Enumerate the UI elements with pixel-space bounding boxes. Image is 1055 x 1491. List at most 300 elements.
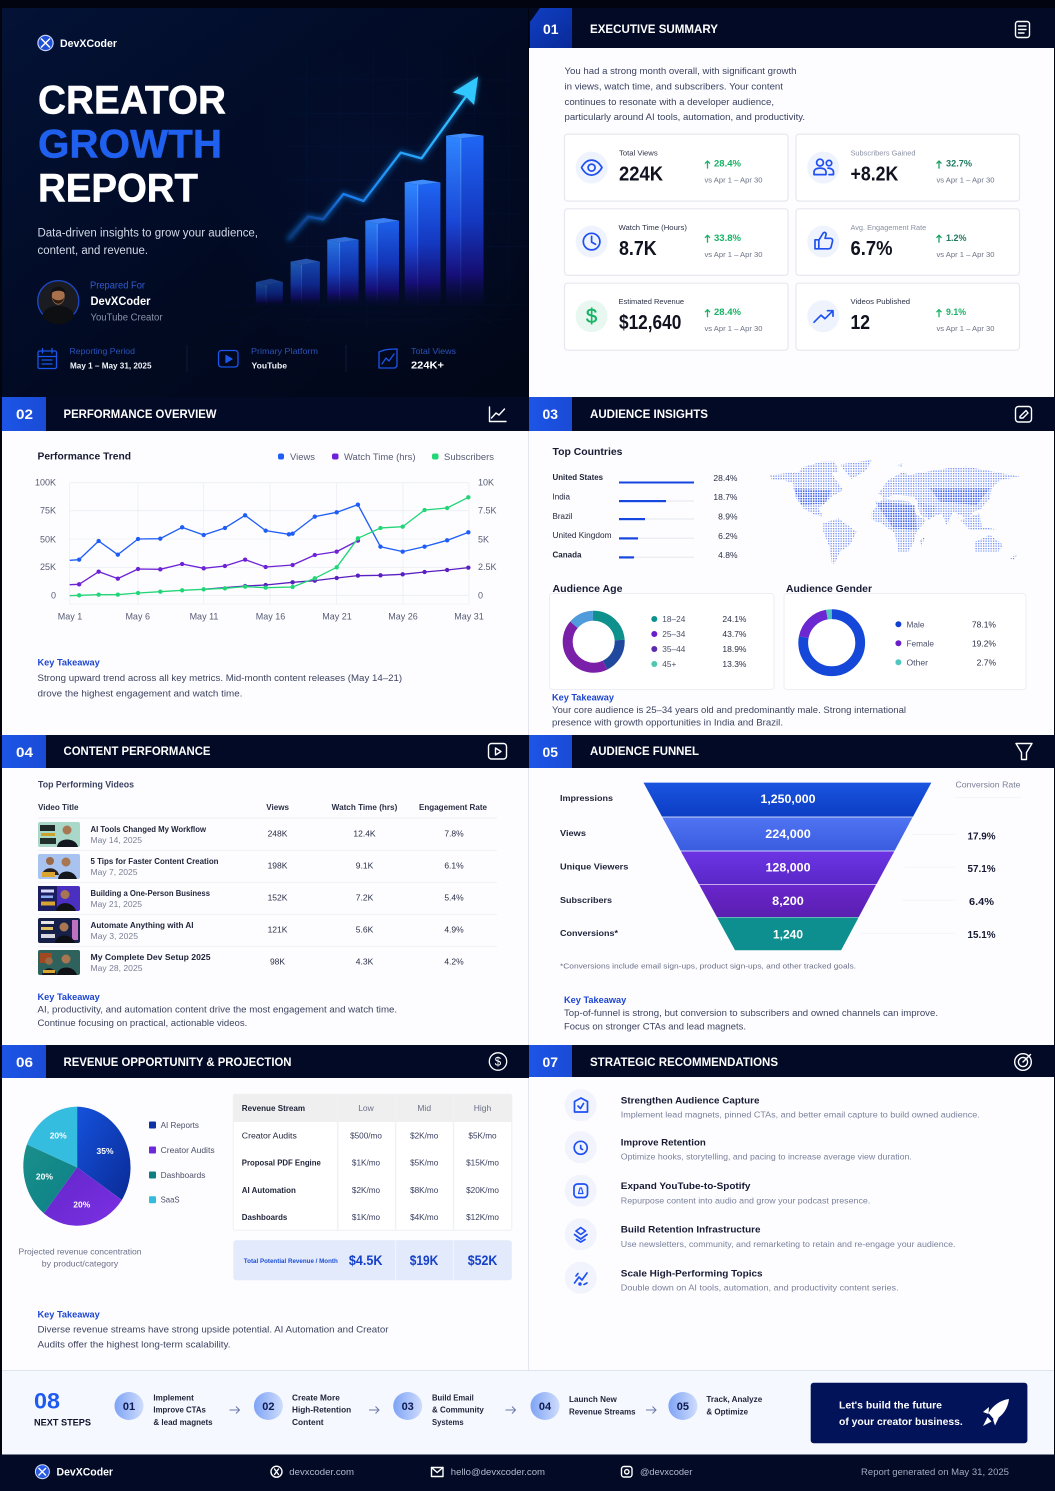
table values: 7.2K xyxy=(356,893,374,903)
footnote: *Conversions include email sign-ups, product sign-ups, and other tracked goals. xyxy=(560,962,856,970)
call to action: Let's build the future xyxy=(839,1400,942,1412)
section number 05 xyxy=(529,735,572,768)
chart heading: Performance Trend xyxy=(38,450,131,462)
step 2: 02 xyxy=(262,1401,275,1413)
title: REPORT xyxy=(38,167,198,211)
revenue table: AI Automation xyxy=(242,1186,296,1195)
section number 02 xyxy=(2,397,46,431)
card: videos published: vs Apr 1 – Apr 30 xyxy=(936,324,994,333)
line chart xyxy=(35,478,497,622)
recommendation 3 xyxy=(565,1175,870,1207)
card: subscribers gained: Subscribers Gained xyxy=(850,151,916,158)
card: subscribers gained: 32.7% xyxy=(946,159,972,169)
revenue table: Creator Audits xyxy=(242,1132,297,1141)
audience age xyxy=(550,583,774,690)
meta: total views: Total Views xyxy=(411,346,456,356)
recommendation 4: Build Retention Infrastructure xyxy=(621,1225,760,1236)
card: estimated revenue: $12,640 xyxy=(619,312,681,334)
next steps label: 08 xyxy=(34,1388,60,1414)
table values: 9.1K xyxy=(356,861,374,871)
recommendation 2: Improve Retention xyxy=(621,1137,706,1148)
key takeaway: drove the highest engagement and watch time. xyxy=(38,688,243,698)
revenue table: $20K/mo xyxy=(466,1186,499,1195)
legend: age: 45+ xyxy=(662,659,676,669)
x-axis labels: May 6 xyxy=(125,612,150,622)
audience age: Audience Age xyxy=(552,583,623,595)
funnel chart xyxy=(643,783,931,950)
revenue table: $1K/mo xyxy=(352,1159,381,1168)
prepared for: YouTube Creator xyxy=(90,313,163,324)
total potential revenue: $19K xyxy=(410,1253,439,1268)
audience age: 24.1% xyxy=(722,614,747,624)
icon: dollar xyxy=(489,1053,507,1070)
section number 02: 02 xyxy=(16,406,33,422)
y-axis right labels: 2.5K xyxy=(478,562,497,572)
card: watch time: 33.8% xyxy=(714,233,741,243)
card: engagement rate: 1.2% xyxy=(946,233,966,243)
conversion rates: 6.4% xyxy=(969,896,995,908)
recommendation 5: Double down on AI tools, automation, and productivity content series. xyxy=(621,1284,899,1293)
funnel chart: 224,000 xyxy=(765,827,811,841)
panel: hero cover xyxy=(2,8,560,397)
revenue table: $5K/mo xyxy=(410,1159,439,1168)
footer social xyxy=(622,1466,692,1477)
card: total views: vs Apr 1 – Apr 30 xyxy=(704,176,762,185)
icon: globe badge xyxy=(1016,406,1032,422)
card: estimated revenue: $ xyxy=(586,306,597,328)
revenue table: Proposal PDF Engine xyxy=(242,1159,321,1168)
video titles and dates: 5 Tips for Faster Content Creation xyxy=(90,857,219,866)
key takeaway: Key Takeaway xyxy=(38,1310,100,1320)
report date: Report generated on May 31, 2025 xyxy=(861,1467,1009,1477)
legend: Watch Time (hrs) xyxy=(344,452,416,462)
card: total views xyxy=(564,134,788,201)
recommendation 4 xyxy=(565,1218,956,1250)
donut: age xyxy=(568,616,620,668)
footer website xyxy=(271,1466,354,1477)
summary text: in views, watch time, and subscribers. Your content xyxy=(564,82,783,92)
pie caption: Projected revenue concentration xyxy=(18,1246,142,1256)
prepared for: Prepared For xyxy=(90,281,146,292)
legend: Views xyxy=(290,452,316,462)
recommendation 5: Scale High-Performing Topics xyxy=(621,1268,763,1279)
icon: dollar: $ xyxy=(495,1056,502,1068)
card: videos published xyxy=(796,283,1020,350)
title xyxy=(38,78,226,211)
key takeaway xyxy=(552,693,906,728)
revenue table: Dashboards xyxy=(242,1213,288,1222)
revenue table: $12K/mo xyxy=(466,1213,499,1222)
panel: revenue opportunity xyxy=(2,1045,529,1370)
video table: May 28, 2025 xyxy=(90,964,143,973)
key takeaway: Focus on stronger CTAs and lead magnets. xyxy=(564,1022,746,1032)
pie chart: 20% xyxy=(73,1199,91,1209)
thumbnail 2 xyxy=(38,854,80,879)
pie caption: by product/category xyxy=(42,1259,119,1269)
title: CREATOR xyxy=(38,78,226,122)
card: estimated revenue xyxy=(564,283,788,350)
table values: 248K xyxy=(268,829,288,839)
pie legend: Dashboards xyxy=(161,1170,205,1180)
data series xyxy=(70,495,471,597)
funnel chart: 1,240 xyxy=(773,927,803,941)
y-axis left labels: 100K xyxy=(35,478,56,488)
table values: 4.2% xyxy=(444,957,464,967)
icon: play button xyxy=(488,744,506,759)
table values: 5.4% xyxy=(444,893,464,903)
panel: audience insights xyxy=(529,397,1055,735)
table values: 7.8% xyxy=(444,829,464,839)
arrow xyxy=(506,1406,516,1414)
card: estimated revenue: 28.4% xyxy=(714,307,741,317)
card: videos published: Videos Published xyxy=(850,299,910,306)
icon: document xyxy=(1016,22,1030,38)
revenue table: Revenue Stream xyxy=(242,1104,305,1113)
key takeaway xyxy=(38,1310,388,1350)
subtitle: content, and revenue. xyxy=(38,245,148,257)
total potential revenue: $52K xyxy=(468,1253,498,1268)
card: subscribers gained: vs Apr 1 – Apr 30 xyxy=(936,176,994,185)
funnel stage labels: Unique Viewers xyxy=(560,862,629,872)
heading: STRATEGIC RECOMMENDATIONS xyxy=(590,1055,778,1069)
audience age: 18.9% xyxy=(722,644,747,654)
legend: age: 18–24 xyxy=(662,614,686,624)
recommendation 5 xyxy=(565,1262,899,1294)
pie legend xyxy=(149,1120,215,1205)
pie chart xyxy=(23,1107,131,1226)
recommendation 2 xyxy=(565,1131,912,1163)
arrow xyxy=(369,1406,379,1414)
card: total views: 224K xyxy=(619,164,664,186)
funnel stage labels xyxy=(560,793,629,938)
total potential revenue: $4.5K xyxy=(349,1253,383,1268)
video titles and dates: Building a One-Person Business xyxy=(90,889,211,898)
icon: funnel xyxy=(1016,744,1032,760)
card: engagement rate: Avg. Engagement Rate xyxy=(850,225,926,232)
y-axis left labels xyxy=(35,478,56,600)
key takeaway: Key Takeaway xyxy=(38,992,100,1002)
panel: audience funnel xyxy=(529,735,1055,1045)
step 5 xyxy=(668,1392,763,1420)
top countries: Canada xyxy=(552,550,582,560)
table values: 98K xyxy=(270,957,285,967)
video titles and dates xyxy=(90,825,219,962)
audience gender: 2.7% xyxy=(977,657,996,667)
legend: gender: Female xyxy=(906,638,934,648)
step 5: 05 xyxy=(677,1401,689,1413)
legend: age: 35–44 xyxy=(662,644,686,654)
pie legend: SaaS xyxy=(161,1195,180,1205)
meta: total views: 224K+ xyxy=(411,361,444,372)
x-axis labels: May 16 xyxy=(256,612,285,622)
meta: primary platform xyxy=(218,346,318,371)
brand logo xyxy=(38,35,118,51)
top countries: 8.9% xyxy=(718,512,738,522)
panel: content performance xyxy=(2,735,529,1045)
video titles and dates: Automate Anything with AI xyxy=(90,921,194,930)
pie chart: 20% xyxy=(36,1172,53,1182)
section number 03: 03 xyxy=(542,406,558,422)
arrow xyxy=(646,1406,656,1414)
footer email: hello@devxcoder.com xyxy=(451,1467,545,1477)
revenue table: $2K/mo xyxy=(352,1186,381,1195)
step 3: Systems xyxy=(432,1418,464,1427)
key takeaway: Your core audience is 25–34 years old and predominantly male. Strong international xyxy=(552,705,906,715)
step 2: High-Retention xyxy=(292,1406,351,1414)
top countries: Top Countries xyxy=(552,446,623,458)
table subtitle: Top Performing Videos xyxy=(38,780,134,790)
key takeaway: Key Takeaway xyxy=(552,693,614,703)
heading: PERFORMANCE OVERVIEW xyxy=(64,407,217,421)
funnel stage labels: Impressions xyxy=(560,793,613,803)
thumbnail 5 xyxy=(38,950,80,975)
audience gender: Audience Gender xyxy=(786,583,872,595)
key takeaway: Audits offer the highest long-term scalability. xyxy=(38,1340,231,1350)
y-axis right labels: 10K xyxy=(478,478,494,488)
section number 01: 01 xyxy=(543,21,559,37)
key takeaway xyxy=(564,995,938,1032)
audience gender: 19.2% xyxy=(972,638,996,648)
panel: strategic recommendations xyxy=(529,1045,1055,1370)
audience age: 43.7% xyxy=(722,629,747,639)
pie chart: 35% xyxy=(96,1146,114,1156)
revenue table: Low xyxy=(358,1103,375,1113)
title: GROWTH xyxy=(38,123,222,167)
card: subscribers gained xyxy=(796,134,1020,201)
subtitle xyxy=(38,227,258,257)
conversion rates: 57.1% xyxy=(968,863,996,875)
card: watch time: Watch Time (Hours) xyxy=(618,225,687,232)
summary text: particularly around AI tools, automation, and productivity. xyxy=(564,112,805,122)
world dot map xyxy=(770,460,1020,563)
table header: Views xyxy=(266,803,290,812)
audience age: 13.3% xyxy=(722,659,747,669)
icon: rocket xyxy=(983,1399,1009,1426)
recommendation 3: Repurpose content into audio and grow your podcast presence. xyxy=(621,1196,870,1205)
meta: primary platform: YouTube xyxy=(252,361,287,371)
table values: 5.6K xyxy=(356,925,374,935)
section number 06: 06 xyxy=(16,1054,33,1070)
card: videos published: 9.1% xyxy=(946,307,966,317)
top countries xyxy=(552,446,738,560)
section number 07: 07 xyxy=(542,1054,558,1070)
step 1 xyxy=(114,1392,213,1427)
key takeaway: Key Takeaway xyxy=(564,995,626,1005)
revenue table: $4K/mo xyxy=(410,1213,439,1222)
top countries: 28.4% xyxy=(713,473,738,483)
table header: Watch Time (hrs) xyxy=(332,803,398,812)
audience gender: 78.1% xyxy=(972,619,996,629)
table header xyxy=(38,803,488,812)
table values: 12.4K xyxy=(353,829,376,839)
card: engagement rate xyxy=(796,209,1020,275)
video titles and dates: AI Tools Changed My Workflow xyxy=(90,825,207,834)
conversion rates xyxy=(861,780,1022,941)
card: estimated revenue: vs Apr 1 – Apr 30 xyxy=(704,324,762,333)
meta: reporting period: May 1 – May 31, 2025 xyxy=(70,361,152,371)
legend xyxy=(278,452,495,462)
meta: primary platform: Primary Platform xyxy=(251,346,318,356)
summary text: You had a strong month overall, with significant growth xyxy=(564,66,796,76)
section number 01 xyxy=(530,8,572,48)
video table: May 14, 2025 xyxy=(90,836,143,845)
y-axis left labels: 50K xyxy=(40,534,56,544)
panel: footer xyxy=(0,1454,1055,1491)
call to action: of your creator business. xyxy=(839,1416,963,1428)
column divider xyxy=(528,431,530,1370)
x-axis labels: May 31 xyxy=(454,612,484,622)
step 3: Build Email xyxy=(432,1394,474,1402)
y-axis left labels: 0 xyxy=(51,590,56,600)
total potential revenue xyxy=(233,1240,512,1280)
step 4 xyxy=(530,1392,636,1420)
revenue table: $5K/mo xyxy=(468,1132,497,1141)
heading: AUDIENCE INSIGHTS xyxy=(590,407,708,421)
card: estimated revenue: Estimated Revenue xyxy=(618,299,684,306)
conversion rates: 15.1% xyxy=(968,929,996,941)
step 3: 03 xyxy=(402,1401,414,1413)
next steps label: NEXT STEPS xyxy=(34,1418,91,1428)
key takeaway xyxy=(38,658,402,698)
series: watch time xyxy=(70,538,360,586)
revenue table: $15K/mo xyxy=(466,1159,499,1168)
funnel stage labels: Conversions* xyxy=(560,928,619,938)
summary text xyxy=(564,66,805,122)
top countries: 6.2% xyxy=(718,531,738,541)
step 4: Launch New xyxy=(569,1395,618,1404)
section number 03 xyxy=(529,397,572,431)
footer brand xyxy=(35,1465,114,1479)
recommendation 1: Implement lead magnets, pinned CTAs, and better email capture to build owned audience. xyxy=(621,1110,980,1119)
series: views xyxy=(70,502,471,562)
funnel chart: 128,000 xyxy=(766,860,811,874)
video table xyxy=(38,803,497,975)
revenue table: $2K/mo xyxy=(410,1132,439,1141)
funnel stage labels: Subscribers xyxy=(560,895,612,905)
icon: line chart xyxy=(490,407,506,422)
x-axis labels: May 11 xyxy=(190,612,218,622)
video table: May 7, 2025 xyxy=(90,868,138,877)
arrow xyxy=(230,1406,240,1414)
footer social: @devxcoder xyxy=(640,1467,692,1477)
step 1: 01 xyxy=(123,1401,135,1413)
y-axis right labels xyxy=(478,478,497,600)
section number 07 xyxy=(529,1045,572,1077)
revenue table: Mid xyxy=(417,1103,431,1113)
video table: May 21, 2025 xyxy=(90,900,143,909)
step 1: Improve CTAs xyxy=(153,1406,206,1414)
step 1: & lead magnets xyxy=(153,1418,213,1427)
card: total views: Total Views xyxy=(619,151,658,158)
pie legend: AI Reports xyxy=(161,1120,199,1130)
thumbnail 1 xyxy=(38,822,80,847)
section number 04: 04 xyxy=(16,744,33,760)
prepared for xyxy=(90,281,163,324)
card: subscribers gained: +8.2K xyxy=(850,164,899,186)
footer brand: DevXCoder xyxy=(56,1466,114,1478)
footer website: devxcoder.com xyxy=(289,1467,354,1477)
recommendation 1: Strengthen Audience Capture xyxy=(621,1095,760,1106)
step 2: Create More xyxy=(292,1394,340,1402)
revenue table: $1K/mo xyxy=(352,1213,381,1222)
key takeaway: Key Takeaway xyxy=(38,658,100,668)
icon: target xyxy=(1015,1054,1031,1070)
table values: 6.1% xyxy=(444,861,464,871)
top countries: 18.7% xyxy=(713,492,738,502)
table values: 121K xyxy=(268,925,288,935)
section number 05: 05 xyxy=(542,744,558,760)
panel: executive summary xyxy=(529,8,1055,397)
top countries: United States xyxy=(552,473,604,482)
legend: age: 25–34 xyxy=(662,629,686,639)
key takeaway: Continue focusing on practical, actionable videos. xyxy=(38,1018,247,1028)
series: subscribers xyxy=(70,495,471,597)
y-axis right labels: 5K xyxy=(478,534,489,544)
card: watch time: vs Apr 1 – Apr 30 xyxy=(704,250,762,259)
meta: total views xyxy=(379,346,456,372)
panel: performance overview xyxy=(2,397,529,735)
recommendation 1 xyxy=(565,1089,980,1121)
meta: reporting period xyxy=(38,346,152,371)
card: total views: 28.4% xyxy=(714,159,741,169)
y-axis left labels: 75K xyxy=(40,506,56,516)
card: engagement rate: 6.7% xyxy=(850,238,893,260)
recommendation 4: Use newsletters, community, and remarketing to retain and re-engage your audience. xyxy=(621,1240,956,1249)
video titles and dates: My Complete Dev Setup 2025 xyxy=(90,953,211,962)
conversion rates: 17.9% xyxy=(968,830,996,842)
donut: gender xyxy=(803,614,860,671)
heading: REVENUE OPPORTUNITY & PROJECTION xyxy=(64,1055,292,1069)
top countries: India xyxy=(552,492,571,502)
table values: 152K xyxy=(268,893,288,903)
revenue table: $8K/mo xyxy=(410,1186,439,1195)
table header: Engagement Rate xyxy=(419,803,488,812)
funnel stage labels: Views xyxy=(560,828,586,838)
y-axis left labels: 25K xyxy=(40,562,56,572)
series: watch time lower xyxy=(204,565,471,589)
top countries: 4.8% xyxy=(718,550,738,560)
table values xyxy=(268,829,464,967)
chart illustration: rising 3D bars with arrow xyxy=(189,50,525,328)
panel: next steps xyxy=(2,1370,1054,1454)
pie legend: Creator Audits xyxy=(161,1145,215,1155)
meta: reporting period: Reporting Period xyxy=(70,346,135,356)
step 3: & Community xyxy=(432,1406,484,1414)
section number 04 xyxy=(2,735,46,768)
step 2 xyxy=(254,1392,351,1427)
key takeaway: Strong upward trend across all key metrics. Mid-month content releases (May 14–21) xyxy=(38,673,402,683)
audience gender xyxy=(784,583,1026,690)
revenue table: $500/mo xyxy=(350,1132,382,1141)
brand logo: DevXCoder xyxy=(60,38,118,50)
x-axis labels: May 1 xyxy=(58,612,82,622)
step 1: Implement xyxy=(153,1394,194,1402)
total potential revenue: Total Potential Revenue / Month xyxy=(244,1258,338,1265)
y-axis right labels: 7.5K xyxy=(478,506,497,516)
step 2: Content xyxy=(292,1418,324,1427)
step 4: Revenue Streams xyxy=(569,1408,636,1416)
legend: age xyxy=(651,614,686,669)
recommendation 2: Optimize hooks, storytelling, and pacing to increase average view duration. xyxy=(621,1152,912,1161)
recommendation 3: Expand YouTube-to-Spotify xyxy=(621,1181,751,1192)
legend: Subscribers xyxy=(444,452,495,462)
x-axis labels xyxy=(58,612,484,622)
call to action xyxy=(811,1383,1027,1443)
step 3 xyxy=(393,1392,484,1427)
pie caption xyxy=(18,1246,142,1269)
card: videos published: 12 xyxy=(850,312,870,334)
card: watch time xyxy=(564,209,788,275)
